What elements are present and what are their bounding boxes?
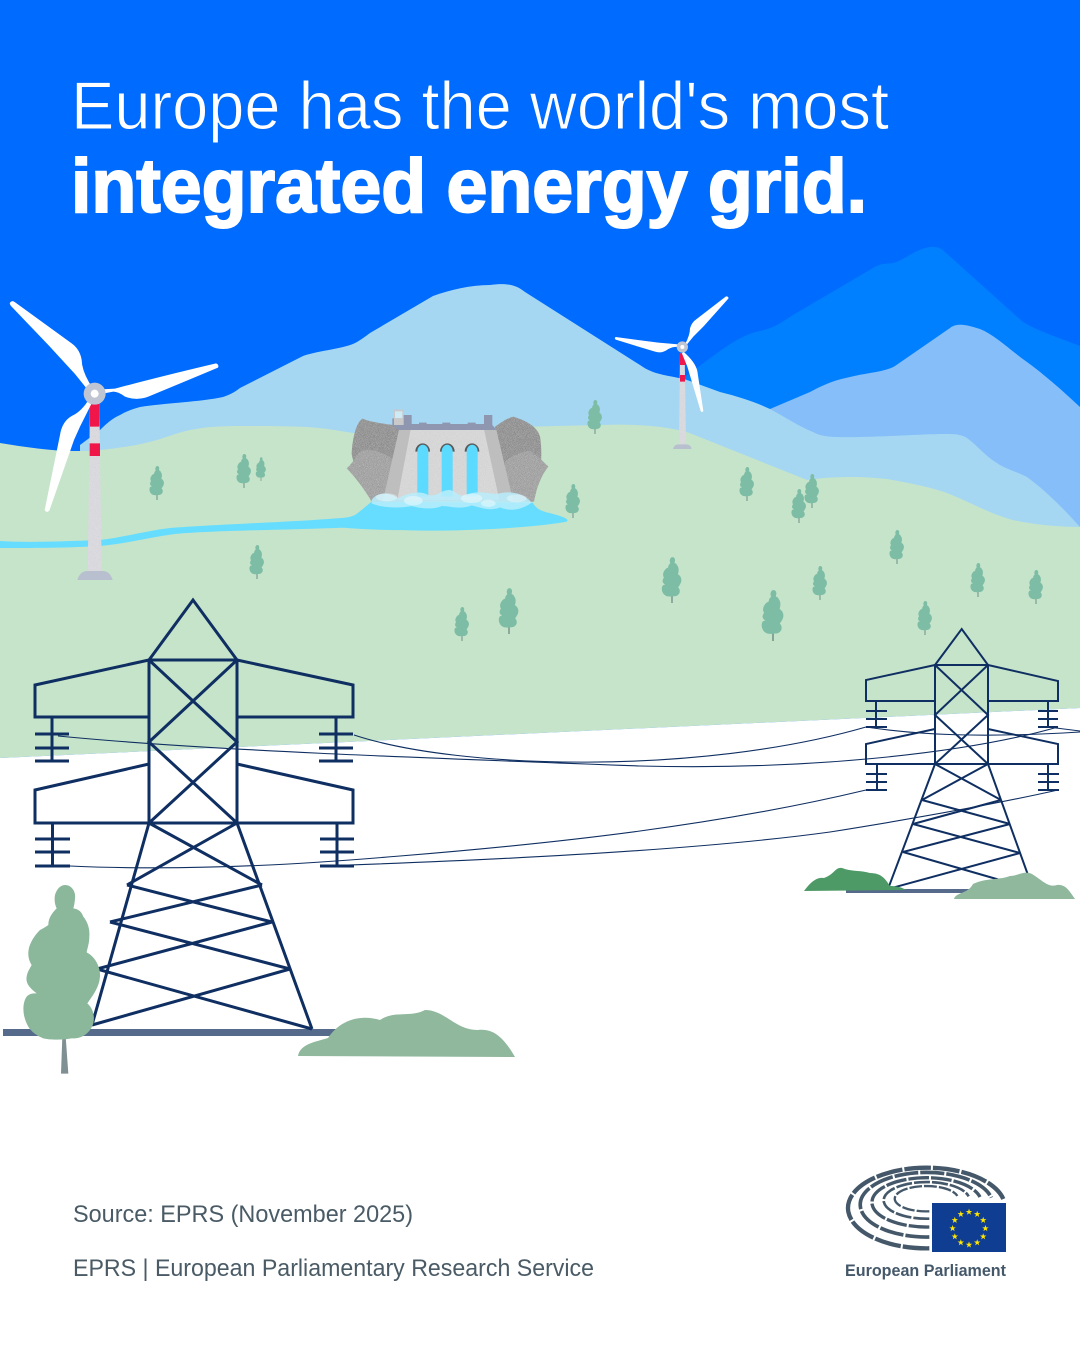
house window (395, 411, 402, 418)
sky background (0, 0, 1080, 800)
blades (10, 301, 218, 512)
mid mountain (740, 325, 1080, 560)
green hills (0, 425, 1080, 758)
upper arms (35, 660, 353, 717)
dam face (397, 429, 499, 500)
legs and bracing (92, 823, 312, 1029)
near mountain (80, 284, 1080, 600)
title (71, 68, 889, 229)
pylon top (149, 600, 237, 660)
river (0, 517, 356, 548)
hub (677, 341, 688, 353)
hub centre (91, 390, 99, 398)
legs and bracing (888, 764, 1028, 889)
hub (84, 383, 106, 405)
pylon body (149, 660, 237, 823)
lower arms (866, 729, 1058, 764)
trunk (61, 1037, 68, 1074)
dam wall (383, 428, 513, 502)
bush: dark green (804, 868, 906, 891)
lake (340, 502, 568, 531)
source text: Source: EPRS (November 2025) (73, 1201, 413, 1228)
hub centre (680, 345, 684, 349)
power lines (58, 727, 1080, 868)
title line 2: integrated energy grid. (71, 144, 867, 229)
dam crest (392, 415, 497, 430)
insulators (866, 700, 1059, 791)
base (77, 571, 113, 580)
control house (394, 410, 404, 425)
canopy (23, 885, 100, 1040)
upper arms (866, 665, 1058, 701)
credit text: EPRS | European Parliamentary Research Service (73, 1255, 594, 1282)
big foreground tree (23, 885, 100, 1074)
hemicycle (848, 1168, 1003, 1248)
bush: large (298, 1010, 515, 1057)
base bar: large pylon (3, 1029, 343, 1036)
hydro dam (340, 410, 568, 531)
lower arms (35, 764, 353, 823)
logo wordmark: European Parliament (845, 1262, 1006, 1280)
tower (88, 403, 102, 572)
title line 1: Europe has the world's most (71, 68, 889, 144)
far mountain (660, 247, 1080, 560)
insulators (35, 717, 354, 866)
EU flag (932, 1203, 1006, 1252)
water outlets (415, 443, 479, 497)
large wind turbine (10, 301, 218, 580)
pylon top (935, 629, 988, 665)
front rocks (347, 450, 548, 502)
back rocks (352, 417, 541, 502)
base (673, 444, 692, 449)
large pylon (35, 600, 354, 1029)
small wind turbine (615, 296, 728, 449)
logo: European Parliament (845, 1168, 1006, 1280)
tower red bands (90, 404, 100, 456)
small pylon (866, 629, 1059, 889)
tower red bands (680, 353, 685, 382)
pylon body (935, 665, 988, 764)
bush: pale green (954, 873, 1075, 899)
foam (372, 490, 532, 510)
base bar: small pylon (846, 889, 971, 893)
forest trees (149, 400, 1043, 641)
ground (0, 708, 1080, 1350)
tower (679, 353, 686, 444)
flag stars (949, 1209, 989, 1248)
blades (615, 296, 728, 412)
